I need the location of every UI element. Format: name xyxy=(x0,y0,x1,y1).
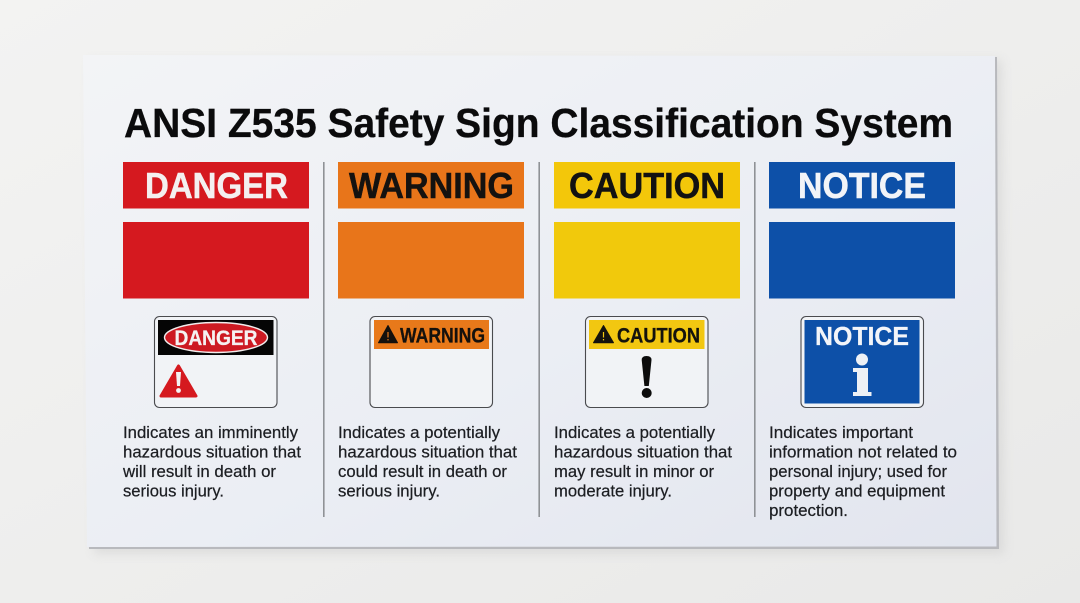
danger description: serious injury. xyxy=(123,482,224,500)
notice description: Indicates important xyxy=(769,424,914,442)
icon: caution triangle xyxy=(594,326,614,343)
caution sign: CAUTION xyxy=(617,324,700,348)
title: ANSI Z535 Safety Sign Classification System xyxy=(124,100,953,146)
panel: notice column xyxy=(769,162,957,520)
icon: exclamation mark xyxy=(642,356,652,398)
danger description: hazardous situation that xyxy=(123,444,302,462)
danger sign xyxy=(154,316,277,408)
danger description: will result in death or xyxy=(122,463,277,481)
danger colour swatch xyxy=(123,222,309,298)
caution header: CAUTION xyxy=(569,165,725,206)
notice sign xyxy=(801,316,924,408)
column dividers xyxy=(323,162,756,517)
icon: red warning triangle xyxy=(161,366,196,396)
caution colour swatch xyxy=(554,222,740,298)
panel: caution column xyxy=(554,162,740,500)
warning description: could result in death or xyxy=(338,463,508,481)
danger description: Indicates an imminently xyxy=(123,424,299,442)
caution description: hazardous situation that xyxy=(554,444,733,462)
notice colour swatch xyxy=(769,222,955,298)
panel: danger column xyxy=(122,162,309,500)
notice header xyxy=(769,162,955,208)
icon: information i xyxy=(853,354,872,396)
caution description: moderate injury. xyxy=(554,482,672,500)
panel: warning column xyxy=(338,162,524,500)
warning description: Indicates a potentially xyxy=(338,424,501,442)
caution sign xyxy=(586,316,708,408)
notice description: information not related to xyxy=(769,444,957,462)
notice description xyxy=(769,424,957,520)
warning header: WARNING xyxy=(349,165,514,206)
danger header: DANGER xyxy=(145,165,288,206)
warning description xyxy=(338,424,518,500)
panel: sign board xyxy=(83,55,996,547)
warning sign xyxy=(370,316,492,408)
notice description: protection. xyxy=(769,502,848,520)
danger sign: DANGER xyxy=(174,327,258,350)
warning sign: WARNING xyxy=(400,324,485,348)
caution description: may result in minor or xyxy=(554,463,715,481)
notice header: NOTICE xyxy=(798,165,926,206)
caution description: Indicates a potentially xyxy=(554,424,716,442)
danger description xyxy=(122,424,302,500)
warning colour swatch xyxy=(338,222,524,298)
caution description xyxy=(554,424,733,500)
notice sign: NOTICE xyxy=(815,321,909,351)
notice description: property and equipment xyxy=(769,482,946,500)
notice description: personal injury; used for xyxy=(769,463,948,481)
warning description: hazardous situation that xyxy=(338,444,518,462)
icon: warning triangle xyxy=(378,326,398,343)
warning description: serious injury. xyxy=(338,482,440,500)
